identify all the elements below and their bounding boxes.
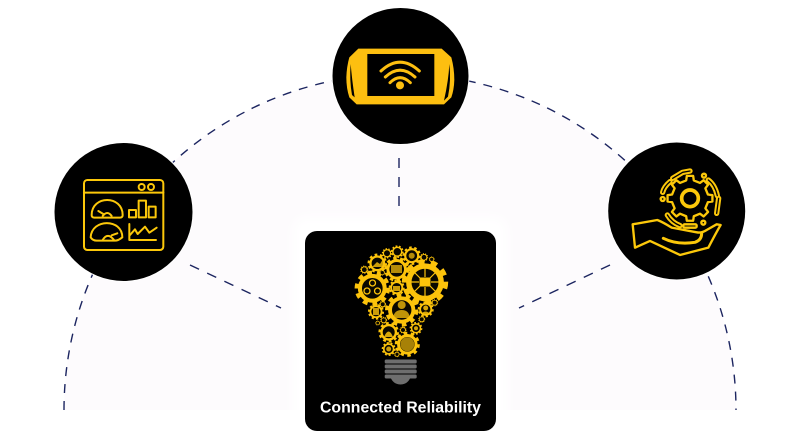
node: dashboard icon bbox=[54, 142, 194, 282]
panel: Connected Reliability card bbox=[305, 231, 496, 431]
icon: dashboard window bbox=[84, 180, 163, 250]
dashed connectors bbox=[190, 158, 610, 308]
gear interior details bbox=[364, 253, 439, 352]
dashed arc bbox=[64, 74, 736, 410]
icon: rugged tablet with wifi bbox=[346, 49, 454, 104]
card glow bbox=[293, 217, 507, 432]
heading: Connected Reliability: Connected Reliability bbox=[320, 400, 481, 416]
icon: bulb base bbox=[385, 360, 417, 384]
node: hand with gear icon bbox=[607, 142, 746, 280]
icon: lightbulb of gears bbox=[357, 246, 445, 357]
icon: hand holding gear bbox=[633, 171, 721, 255]
node: wireless device icon bbox=[332, 7, 470, 145]
dome background bbox=[64, 74, 736, 410]
